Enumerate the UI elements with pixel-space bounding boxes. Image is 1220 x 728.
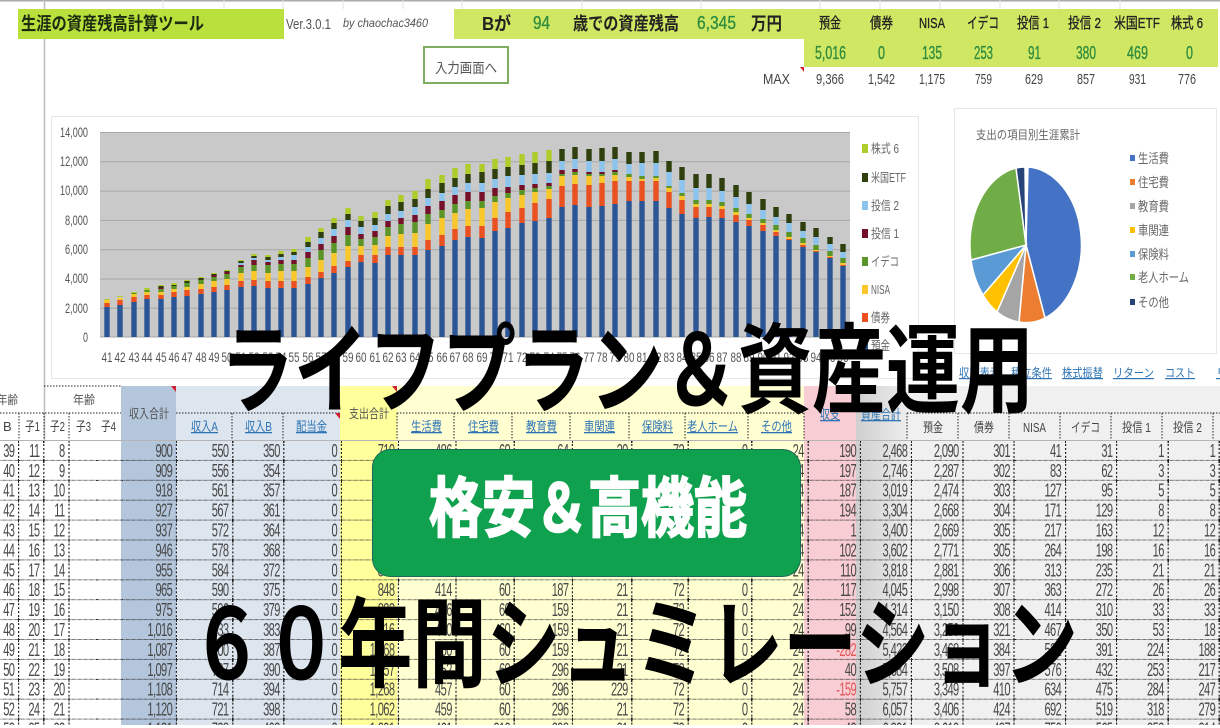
x axis age labels: 86 — [704, 349, 715, 365]
x axis age labels: 77 — [584, 349, 595, 365]
table column headers: family: 子4 — [101, 419, 116, 434]
x axis age labels: 68 — [462, 349, 474, 365]
summary bar: balance at age: 万円 — [751, 14, 782, 34]
navigation links: 株式振替 — [1062, 365, 1103, 380]
x axis age labels: 53 — [262, 349, 274, 365]
table linked headers: 教育費 — [526, 419, 557, 434]
x axis age labels: 76 — [570, 349, 581, 365]
table header lines — [0, 386, 1220, 441]
x axis age labels: 96 — [838, 349, 849, 365]
max values row: 776 — [1178, 71, 1196, 88]
table column headers: family — [3, 419, 116, 434]
x axis age labels: 75 — [556, 349, 568, 365]
stacked bars — [107, 147, 843, 337]
max values row: 857 — [1077, 71, 1095, 88]
x axis age labels: 46 — [168, 349, 180, 365]
x axis age labels: 55 — [288, 349, 300, 365]
summary bar: balance at age: Bが — [482, 13, 511, 34]
table linked headers: 保険料 — [642, 419, 673, 434]
table asset headers: 投信 1 — [1122, 420, 1151, 435]
chart legend: 投信 1 — [871, 226, 899, 241]
asset class labels: 投信 1 — [1017, 15, 1049, 32]
current asset values: 380 — [1076, 43, 1096, 63]
summary bar: balance at age: 歳での資産残高 — [573, 13, 679, 34]
max values row — [763, 67, 1196, 88]
table linked headers: 配当金 — [296, 419, 327, 434]
chart legend: 株式 6 — [871, 141, 899, 156]
x axis age labels: 54 — [276, 349, 287, 365]
x axis age labels: 61 — [370, 349, 381, 365]
x axis age labels: 66 — [436, 349, 448, 365]
x axis age labels: 58 — [328, 349, 340, 365]
x axis age labels: 52 — [248, 349, 260, 365]
current asset values: 0 — [878, 43, 885, 63]
table linked headers: 収支 — [820, 407, 840, 422]
max values row: 759 — [975, 71, 992, 88]
navigation links: 収支表示 — [959, 366, 1000, 380]
x axis age labels: 44 — [142, 349, 153, 365]
x axis age labels: 69 — [476, 349, 488, 365]
y axis labels — [60, 124, 88, 345]
asset class labels: 米国ETF — [1114, 15, 1160, 32]
asset class labels: イデコ — [967, 14, 999, 32]
x axis age labels: 47 — [182, 349, 193, 365]
table linked headers: 生活費 — [411, 419, 442, 434]
table asset headers: 投信 2 — [1173, 420, 1202, 435]
panel: expense pie chart — [954, 108, 1216, 354]
asset class labels — [819, 14, 1203, 32]
y axis labels: 12,000 — [60, 153, 88, 169]
x axis age labels: 78 — [596, 349, 608, 365]
max values row: MAX — [763, 71, 790, 88]
table asset headers: NISA — [1023, 420, 1046, 435]
y axis labels: 4,000 — [65, 270, 88, 286]
chart legend: 預金 — [871, 339, 890, 353]
table group header: age: 年齢 — [73, 393, 95, 407]
button: input screen: 入力画面へ — [435, 60, 497, 76]
x axis age labels: 81 — [636, 349, 648, 365]
table column headers: family: 子1 — [25, 419, 40, 434]
table linked headers: その他 — [761, 419, 792, 434]
x axis age labels: 50 — [222, 349, 233, 365]
table column headers: family: B — [3, 419, 12, 434]
x axis age labels: 43 — [128, 349, 140, 365]
x axis age labels: 79 — [610, 349, 621, 365]
x axis age labels: 65 — [422, 349, 434, 365]
x axis age labels — [102, 349, 849, 365]
asset class labels: 投信 2 — [1068, 15, 1101, 32]
asset class labels: 債券 — [870, 15, 893, 32]
x axis age labels: 87 — [716, 349, 728, 365]
x axis age labels: 41 — [102, 349, 113, 365]
x axis age labels: 56 — [302, 349, 314, 365]
callout: cheap and high function — [372, 450, 800, 576]
x axis age labels: 90 — [758, 349, 769, 365]
x axis age labels: 64 — [410, 349, 421, 365]
chart legend: NISA — [871, 283, 890, 297]
current asset values: 135 — [922, 43, 942, 63]
chart legend: 債券 — [871, 310, 890, 325]
table linked headers: 老人ホーム — [687, 419, 738, 434]
pie slices — [970, 167, 1081, 323]
table linked headers: 収入A — [191, 419, 218, 434]
current asset values: 253 — [974, 43, 993, 63]
table column headers: family: 子2 — [50, 419, 65, 434]
x axis age labels: 63 — [396, 349, 407, 365]
x axis age labels: 94 — [810, 349, 822, 365]
y axis labels: 14,000 — [60, 124, 88, 140]
table linked headers: 住宅費 — [468, 419, 499, 434]
x axis age labels: 48 — [196, 349, 207, 365]
table asset headers: 預金 — [923, 420, 943, 435]
table column headers: family: 子3 — [76, 419, 91, 434]
navigation links: コスト — [1165, 366, 1195, 380]
x axis age labels: 89 — [744, 349, 755, 365]
table linked headers: 車関連 — [584, 419, 615, 434]
x axis age labels: 49 — [208, 349, 220, 365]
y axis labels: 0 — [83, 329, 88, 345]
y axis labels: 10,000 — [60, 182, 88, 198]
x axis age labels: 71 — [502, 349, 514, 365]
table totals headers: 収入合計 — [129, 406, 169, 421]
x axis age labels: 57 — [316, 349, 327, 365]
x axis age labels: 95 — [824, 349, 836, 365]
current asset values: 91 — [1028, 43, 1041, 63]
comment markers — [171, 386, 397, 419]
pie legend: 保険料 — [1138, 247, 1169, 262]
x axis age labels: 72 — [516, 349, 528, 365]
navigation links — [959, 365, 1220, 380]
x axis age labels: 82 — [650, 349, 662, 365]
current asset values: 469 — [1127, 43, 1148, 63]
x axis age labels: 85 — [690, 349, 702, 365]
pie legend — [1130, 151, 1189, 310]
x axis age labels: 42 — [114, 349, 126, 365]
table linked headers: 資産合計 — [861, 407, 901, 422]
version text: by chaochac3460 — [343, 16, 428, 30]
summary bar: balance at age: 6,345 — [697, 13, 736, 33]
table asset headers: 債券 — [974, 420, 994, 435]
max values row: 1,542 — [868, 71, 895, 88]
x axis age labels: 73 — [530, 349, 541, 365]
navigation links: リターン — [1113, 366, 1154, 380]
x axis age labels: 70 — [490, 349, 501, 365]
x axis age labels: 80 — [624, 349, 635, 365]
pie legend: 教育費 — [1138, 199, 1169, 214]
y axis labels: 2,000 — [65, 300, 88, 316]
data table — [0, 441, 1220, 725]
x axis age labels: 88 — [730, 349, 742, 365]
x axis age labels: 83 — [664, 349, 675, 365]
asset class labels: 預金 — [819, 15, 841, 32]
chart legend: 投信 2 — [871, 198, 899, 213]
x axis age labels: 67 — [450, 349, 461, 365]
asset class labels: 株式 6 — [1171, 15, 1203, 32]
chart legend: 米国ETF — [871, 171, 906, 185]
pie legend: 車関連 — [1138, 223, 1169, 238]
y axis labels: 8,000 — [65, 212, 88, 228]
x axis age labels: 74 — [544, 349, 555, 365]
x axis age labels: 59 — [342, 349, 354, 365]
x axis age labels: 93 — [798, 349, 809, 365]
title bar: 生涯の資産残高計算ツール — [21, 13, 204, 34]
pie legend: 老人ホーム — [1138, 270, 1189, 285]
summary bar: balance at age: 94 — [533, 13, 550, 33]
navigation links: 積立条件 — [1011, 365, 1052, 380]
y axis labels: 6,000 — [65, 241, 88, 257]
callout: cheap and high function: 格安＆高機能 — [429, 472, 747, 545]
title bar — [18, 9, 284, 39]
x axis age labels: 60 — [356, 349, 367, 365]
current asset values: 5,016 — [815, 43, 846, 63]
current asset values — [815, 43, 1193, 63]
x axis age labels: 62 — [382, 349, 394, 365]
max values row: 1,175 — [919, 71, 945, 88]
table linked headers — [191, 407, 901, 434]
x axis age labels: 92 — [784, 349, 795, 365]
table totals headers: 支出合計 — [349, 406, 389, 421]
x axis age labels: 91 — [770, 349, 782, 365]
version text: Ver.3.0.1 — [286, 16, 331, 33]
table asset headers — [923, 420, 1202, 435]
table linked headers: 収入B — [245, 419, 272, 434]
current asset values: 0 — [1186, 43, 1193, 63]
panel: expense pie chart: 支出の項目別生涯累計 — [976, 127, 1080, 142]
button: input screen — [424, 47, 508, 83]
x axis age labels: 51 — [236, 349, 247, 365]
pie legend: その他 — [1138, 295, 1169, 310]
x axis age labels: 45 — [156, 349, 167, 365]
table asset headers: イデコ — [1071, 420, 1100, 435]
pie legend: 生活費 — [1138, 151, 1169, 166]
pie legend: 住宅費 — [1138, 175, 1169, 190]
summary bar: balance at age — [454, 9, 1218, 67]
x axis age labels: 84 — [676, 349, 688, 365]
max values row: 9,366 — [816, 71, 844, 88]
chart legend: イデコ — [871, 254, 899, 269]
asset class labels: NISA — [919, 15, 945, 32]
table totals headers — [129, 406, 389, 421]
panel: stacked bar chart of assets by age — [52, 116, 918, 378]
version text — [286, 16, 428, 33]
max values row: 629 — [1025, 71, 1043, 88]
max values row: 931 — [1129, 71, 1146, 88]
chart legend — [862, 141, 906, 353]
table group header: age — [0, 393, 95, 407]
